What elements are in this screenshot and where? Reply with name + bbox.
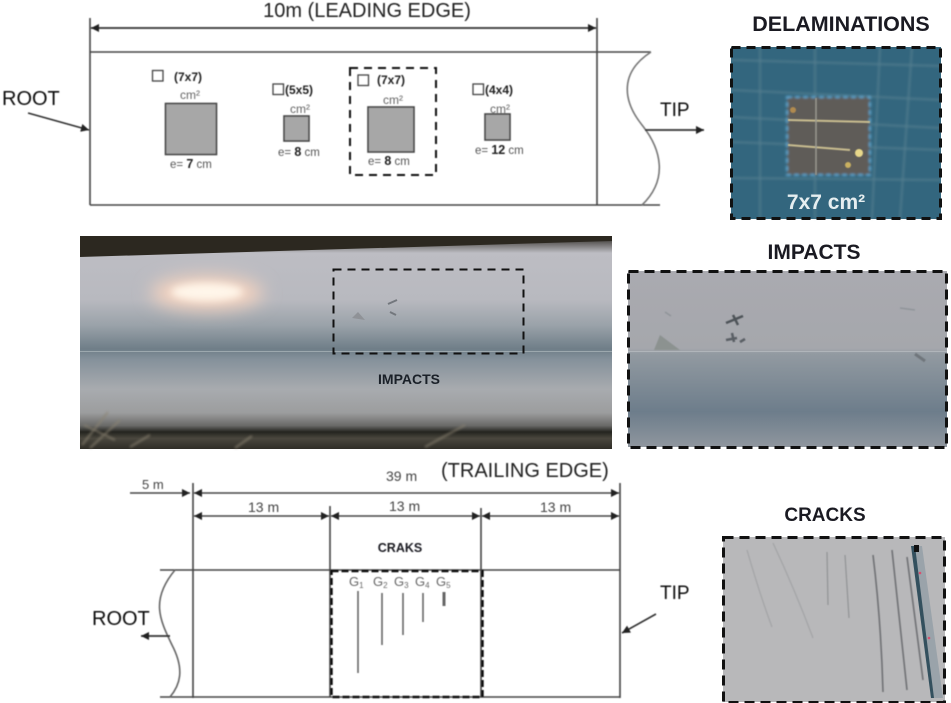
dimension arrows: 13 m: 13 m [389, 498, 420, 514]
defect 4: 4x4: cm² [490, 102, 510, 116]
defect 4: 4x4: (4x4) [485, 83, 513, 97]
crack lines G1 to G5: G [349, 574, 359, 589]
crack lines G1 to G5: G [373, 574, 383, 589]
defect 3: 7x7 highlighted: e= 8 cm [368, 154, 410, 168]
dimension arrows: 13 m [194, 498, 619, 516]
defect 1: 7x7 [152, 70, 216, 171]
defect 1: 7x7: cm² [180, 88, 200, 102]
defect 3: 7x7 highlighted: (7x7) [377, 73, 405, 87]
label: tip: TIP [660, 583, 690, 604]
crack lines G1 to G5: 1 [359, 581, 364, 590]
heading: delaminations: DELAMINATIONS [752, 12, 930, 36]
crack lines G1 to G5: G [394, 574, 404, 589]
defect 2: 5x5: (5x5) [285, 83, 313, 97]
grass detail [82, 412, 465, 448]
dimension arrows: 13 m: 13 m [248, 499, 279, 515]
arrow: root [28, 113, 89, 130]
defect 4: 4x4 [473, 83, 524, 157]
defect 4: 4x4: e= 12 cm [475, 143, 524, 157]
heading: cracks: CRACKS [784, 505, 866, 526]
crack lines G1 to G5: 4 [425, 581, 430, 590]
heading: impacts: IMPACTS [768, 241, 860, 264]
label: root: ROOT [2, 88, 60, 110]
defect 1: 7x7: e= 7 cm [170, 157, 212, 171]
diagram: trailing edge [92, 460, 690, 698]
crack lines G1 to G5: G [436, 574, 446, 589]
dimension arrow: 5 m: 5 m [142, 477, 164, 492]
photo label: 7x7 cm2: 7x7 cm² [787, 191, 865, 214]
crack lines G1 to G5: 5 [446, 581, 451, 590]
blade outline [90, 18, 660, 205]
diagram: leading edge [2, 0, 704, 205]
photo: cracks close-up [723, 537, 945, 702]
label: root: ROOT [92, 608, 150, 630]
defect 2: 5x5 [273, 83, 320, 159]
arrow: root [141, 635, 170, 637]
defect 3: 7x7 highlighted [350, 68, 436, 175]
defect 1: 7x7: (7x7) [174, 70, 202, 84]
crack lines G1 to G5 [349, 574, 451, 673]
crack region box [332, 571, 482, 697]
arrow: tip [645, 129, 704, 131]
defect 2: 5x5: cm² [290, 102, 310, 116]
blade outline [160, 483, 620, 698]
arrow: tip [622, 614, 656, 633]
label: craks: CRAKS [378, 541, 422, 555]
crack lines G1 to G5: 3 [404, 581, 409, 590]
defect 2: 5x5: e= 8 cm [278, 145, 320, 159]
photo: impacts close-up [628, 271, 947, 448]
dimension arrow: 5 m [130, 477, 190, 493]
photo: delamination [731, 47, 941, 219]
dimension label: 39 m trailing edge: 39 m [386, 468, 417, 484]
dimension arrows: 13 m: 13 m [540, 499, 571, 515]
callout box [334, 270, 524, 354]
photo label: impacts: IMPACTS [378, 371, 440, 387]
diagram: trailing edge: (TRAILING EDGE) [441, 460, 609, 482]
photo: blade with impacts [80, 236, 612, 449]
dimension label: 10m leading edge: 10m (LEADING EDGE) [263, 0, 471, 22]
dimension arrow: 10m [91, 27, 596, 29]
crack lines G1 to G5: 2 [383, 581, 388, 590]
label: tip: TIP [660, 100, 690, 121]
crack lines G1 to G5: G [415, 574, 425, 589]
dimension arrow: 39 m [194, 492, 619, 494]
defect 3: 7x7 highlighted: cm² [383, 93, 403, 107]
